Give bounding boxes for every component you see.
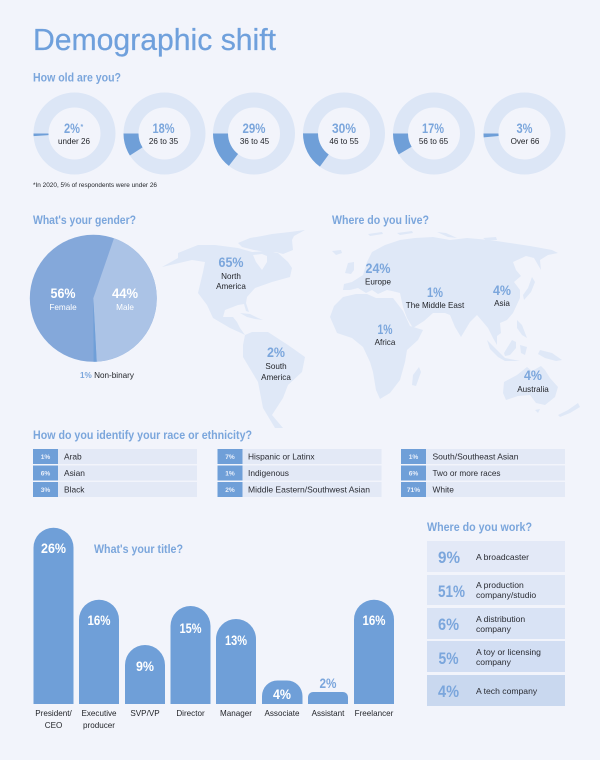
- donut: 26 to 35: [118, 87, 211, 180]
- label: South America: 2%: [267, 344, 285, 360]
- row: distribution company: [427, 608, 565, 639]
- label: Europe: Europe: [365, 278, 392, 286]
- donut: 46 to 55: [297, 87, 391, 180]
- label: Africa: [375, 321, 396, 347]
- map: Cuba and Caribbean: [240, 313, 263, 320]
- row: Two or more races: 6%: [409, 470, 418, 478]
- world map: [162, 230, 580, 428]
- bar: SVP/VP: 9%: [136, 658, 154, 674]
- bar: Executive producer: Executive: [81, 709, 117, 718]
- row: Asian: Asian: [64, 468, 85, 478]
- row: Two or more races: [401, 466, 565, 480]
- row: toy or licensing company: A toy or licensing: [476, 647, 541, 657]
- title: Demographic shift: [33, 22, 276, 57]
- label: The Middle East: [406, 284, 465, 310]
- donut: under 26: *: [80, 124, 84, 131]
- label: South America: [261, 344, 291, 382]
- row: toy or licensing company: [427, 641, 565, 672]
- row: Asian: 6%: [41, 470, 50, 478]
- row: Arab: [33, 449, 197, 464]
- bar: Director: Director: [176, 709, 205, 718]
- bar: Executive producer: [79, 600, 119, 730]
- heading: workplace: Where do you work?: [427, 522, 532, 534]
- donut: 26 to 35: 26 to 35: [149, 137, 179, 146]
- row: Indigenous: [218, 466, 382, 480]
- pie chart: gender: Female: [49, 303, 77, 312]
- map: Borneo: [504, 340, 516, 356]
- label: Asia: [493, 282, 511, 308]
- bar: President/CEO: CEO: [45, 721, 62, 730]
- bar: Freelancer: 16%: [362, 612, 386, 628]
- label: Europe: 24%: [366, 260, 391, 276]
- row: distribution company: 6%: [438, 615, 459, 634]
- donut: 36 to 45: 29%: [242, 120, 266, 136]
- label: North America: North: [221, 272, 241, 281]
- row: distribution company: A distribution: [476, 614, 525, 624]
- label: Africa: Africa: [375, 338, 396, 347]
- pie chart: gender: Male: [116, 303, 134, 312]
- footnote: *In 2020, 5% of respondents were under 26: [33, 182, 157, 189]
- map: South America: [243, 332, 305, 428]
- donut: 36 to 45: [207, 86, 301, 181]
- bar: Assistant: 2%: [320, 675, 337, 691]
- row: South/Southeast Asian: [401, 449, 565, 464]
- map: New Zealand: [558, 403, 580, 417]
- row: Arab: 1%: [41, 454, 50, 461]
- panel: workplace table: [427, 541, 565, 706]
- map: Iceland: [332, 250, 342, 255]
- bar: SVP/VP: [125, 645, 165, 718]
- row: toy or licensing company: 5%: [438, 649, 458, 668]
- donut: over 66: Over 66: [511, 137, 540, 146]
- row: Middle Eastern/Southwest Asian: [218, 482, 382, 497]
- row: distribution company: company: [476, 624, 512, 634]
- bar: Manager: 13%: [225, 632, 247, 648]
- donut: under 26: [39, 98, 110, 169]
- row: production company: [427, 575, 565, 605]
- panel: age donuts: [39, 86, 561, 181]
- label: non-binary: 1% Non-binary: [80, 371, 135, 380]
- bar chart: title: [34, 528, 394, 730]
- label: The Middle East: 1%: [427, 284, 443, 300]
- donut: over 66: 3%: [516, 120, 533, 136]
- map: Arctic islands and Greenland: [238, 230, 305, 254]
- row: Hispanic or Latinx: Hispanic or Latinx: [248, 452, 315, 462]
- label: South America: America: [261, 373, 291, 382]
- bar: Associate: 4%: [273, 686, 291, 702]
- row: production company: A production: [476, 580, 524, 590]
- map: Arctic Russian islands: [368, 231, 497, 240]
- map: North America: [162, 245, 292, 335]
- row: Black: 3%: [41, 487, 50, 494]
- label: North America: [216, 254, 246, 291]
- heading: race: How do you identify your race or ethnicity?: [33, 430, 252, 442]
- label: Asia: 4%: [493, 282, 511, 298]
- donut: 56 to 65: 17%: [422, 120, 444, 136]
- pie chart: gender: 56%: [50, 285, 76, 301]
- row: Black: Black: [64, 484, 85, 494]
- label: Australia: [517, 367, 549, 394]
- row: Middle Eastern/Southwest Asian: 2%: [225, 487, 235, 494]
- row: production company: company/studio: [476, 590, 536, 600]
- row: Hispanic or Latinx: [218, 449, 382, 464]
- label: Australia: Australia: [517, 385, 549, 394]
- map: Africa: [330, 294, 423, 399]
- row: South/Southeast Asian: 1%: [409, 454, 418, 461]
- row: Two or more races: Two or more races: [432, 468, 500, 478]
- bar: Associate: Associate: [264, 709, 300, 718]
- label: Europe: [365, 260, 392, 286]
- row: Middle Eastern/Southwest Asian: Middle Eastern/Southwest Asian: [248, 484, 370, 494]
- row: broadcaster: 9%: [438, 548, 460, 567]
- label: Africa: 1%: [378, 321, 393, 337]
- map: Philippines: [517, 320, 527, 338]
- bar: President/CEO: [34, 528, 74, 730]
- bar: Assistant: Assistant: [312, 709, 345, 718]
- heading: age: How old are you?: [33, 72, 121, 84]
- map: Tasmania: [535, 409, 540, 413]
- row: tech company: 4%: [438, 682, 459, 701]
- map: Sulawesi: [520, 345, 527, 355]
- map: Sumatra and Java: [487, 340, 520, 361]
- row: Asian: [33, 466, 197, 480]
- donut: 56 to 65: [388, 88, 480, 179]
- row: broadcaster: [427, 541, 565, 572]
- donut: 26 to 35: 18%: [152, 120, 175, 136]
- row: production company: 51%: [438, 582, 465, 601]
- row: Indigenous: 1%: [225, 470, 235, 478]
- label: The Middle East: The Middle East: [406, 301, 465, 310]
- map: Eurasia: [343, 237, 558, 345]
- bar: President/CEO: 26%: [41, 540, 66, 556]
- row: White: 71%: [407, 487, 420, 494]
- bar: Manager: Manager: [220, 709, 252, 718]
- label: North America: America: [216, 282, 246, 291]
- pie chart: gender: 44%: [112, 285, 139, 301]
- row: South/Southeast Asian: South/Southeast Asian: [432, 452, 519, 462]
- heading: gender: What's your gender?: [33, 215, 136, 227]
- bar: Executive producer: producer: [83, 721, 115, 730]
- donut: under 26: under 26: [58, 137, 90, 146]
- heading: title: What's your title?: [94, 544, 183, 556]
- bar: President/CEO: President/: [35, 709, 72, 718]
- row: tech company: A tech company: [476, 686, 538, 696]
- label: Australia: 4%: [524, 367, 542, 383]
- label: Asia: Asia: [494, 299, 510, 308]
- row: Arab: Arab: [64, 452, 82, 462]
- panel: race table: [33, 449, 565, 497]
- bar: Director: [170, 606, 210, 718]
- donut: 36 to 45: 36 to 45: [240, 137, 270, 146]
- bar: Director: 15%: [180, 620, 202, 636]
- bar: Assistant: [308, 675, 348, 718]
- row: White: [401, 482, 565, 497]
- map: United Kingdom: [345, 262, 354, 274]
- label: North America: 65%: [218, 254, 244, 270]
- map: Australia: [503, 366, 558, 405]
- map: Japan: [523, 277, 535, 300]
- row: broadcaster: A broadcaster: [476, 552, 529, 562]
- donut: 46 to 55: 46 to 55: [329, 137, 359, 146]
- row: Black: [33, 482, 197, 497]
- map: New Guinea: [538, 350, 562, 361]
- row: Indigenous: Indigenous: [248, 468, 289, 478]
- donut: over 66: [488, 97, 561, 170]
- donut: 56 to 65: 56 to 65: [419, 137, 449, 146]
- map: Madagascar: [412, 367, 421, 386]
- donut: 46 to 55: 30%: [332, 120, 356, 136]
- bar: Freelancer: [354, 600, 394, 718]
- bar: Executive producer: 16%: [88, 612, 111, 628]
- bar: SVP/VP: SVP/VP: [130, 709, 160, 718]
- pie chart: gender: [30, 235, 157, 362]
- bar: Manager: [216, 619, 256, 718]
- bar: Associate: [262, 680, 302, 718]
- donut: under 26: 2%: [64, 120, 80, 136]
- bar: Freelancer: Freelancer: [355, 709, 394, 718]
- heading: location: Where do you live?: [332, 215, 429, 227]
- row: White: White: [432, 484, 454, 494]
- row: toy or licensing company: company: [476, 657, 512, 667]
- label: South America: South: [265, 362, 287, 371]
- row: tech company: [427, 675, 565, 706]
- row: Hispanic or Latinx: 7%: [225, 454, 235, 461]
